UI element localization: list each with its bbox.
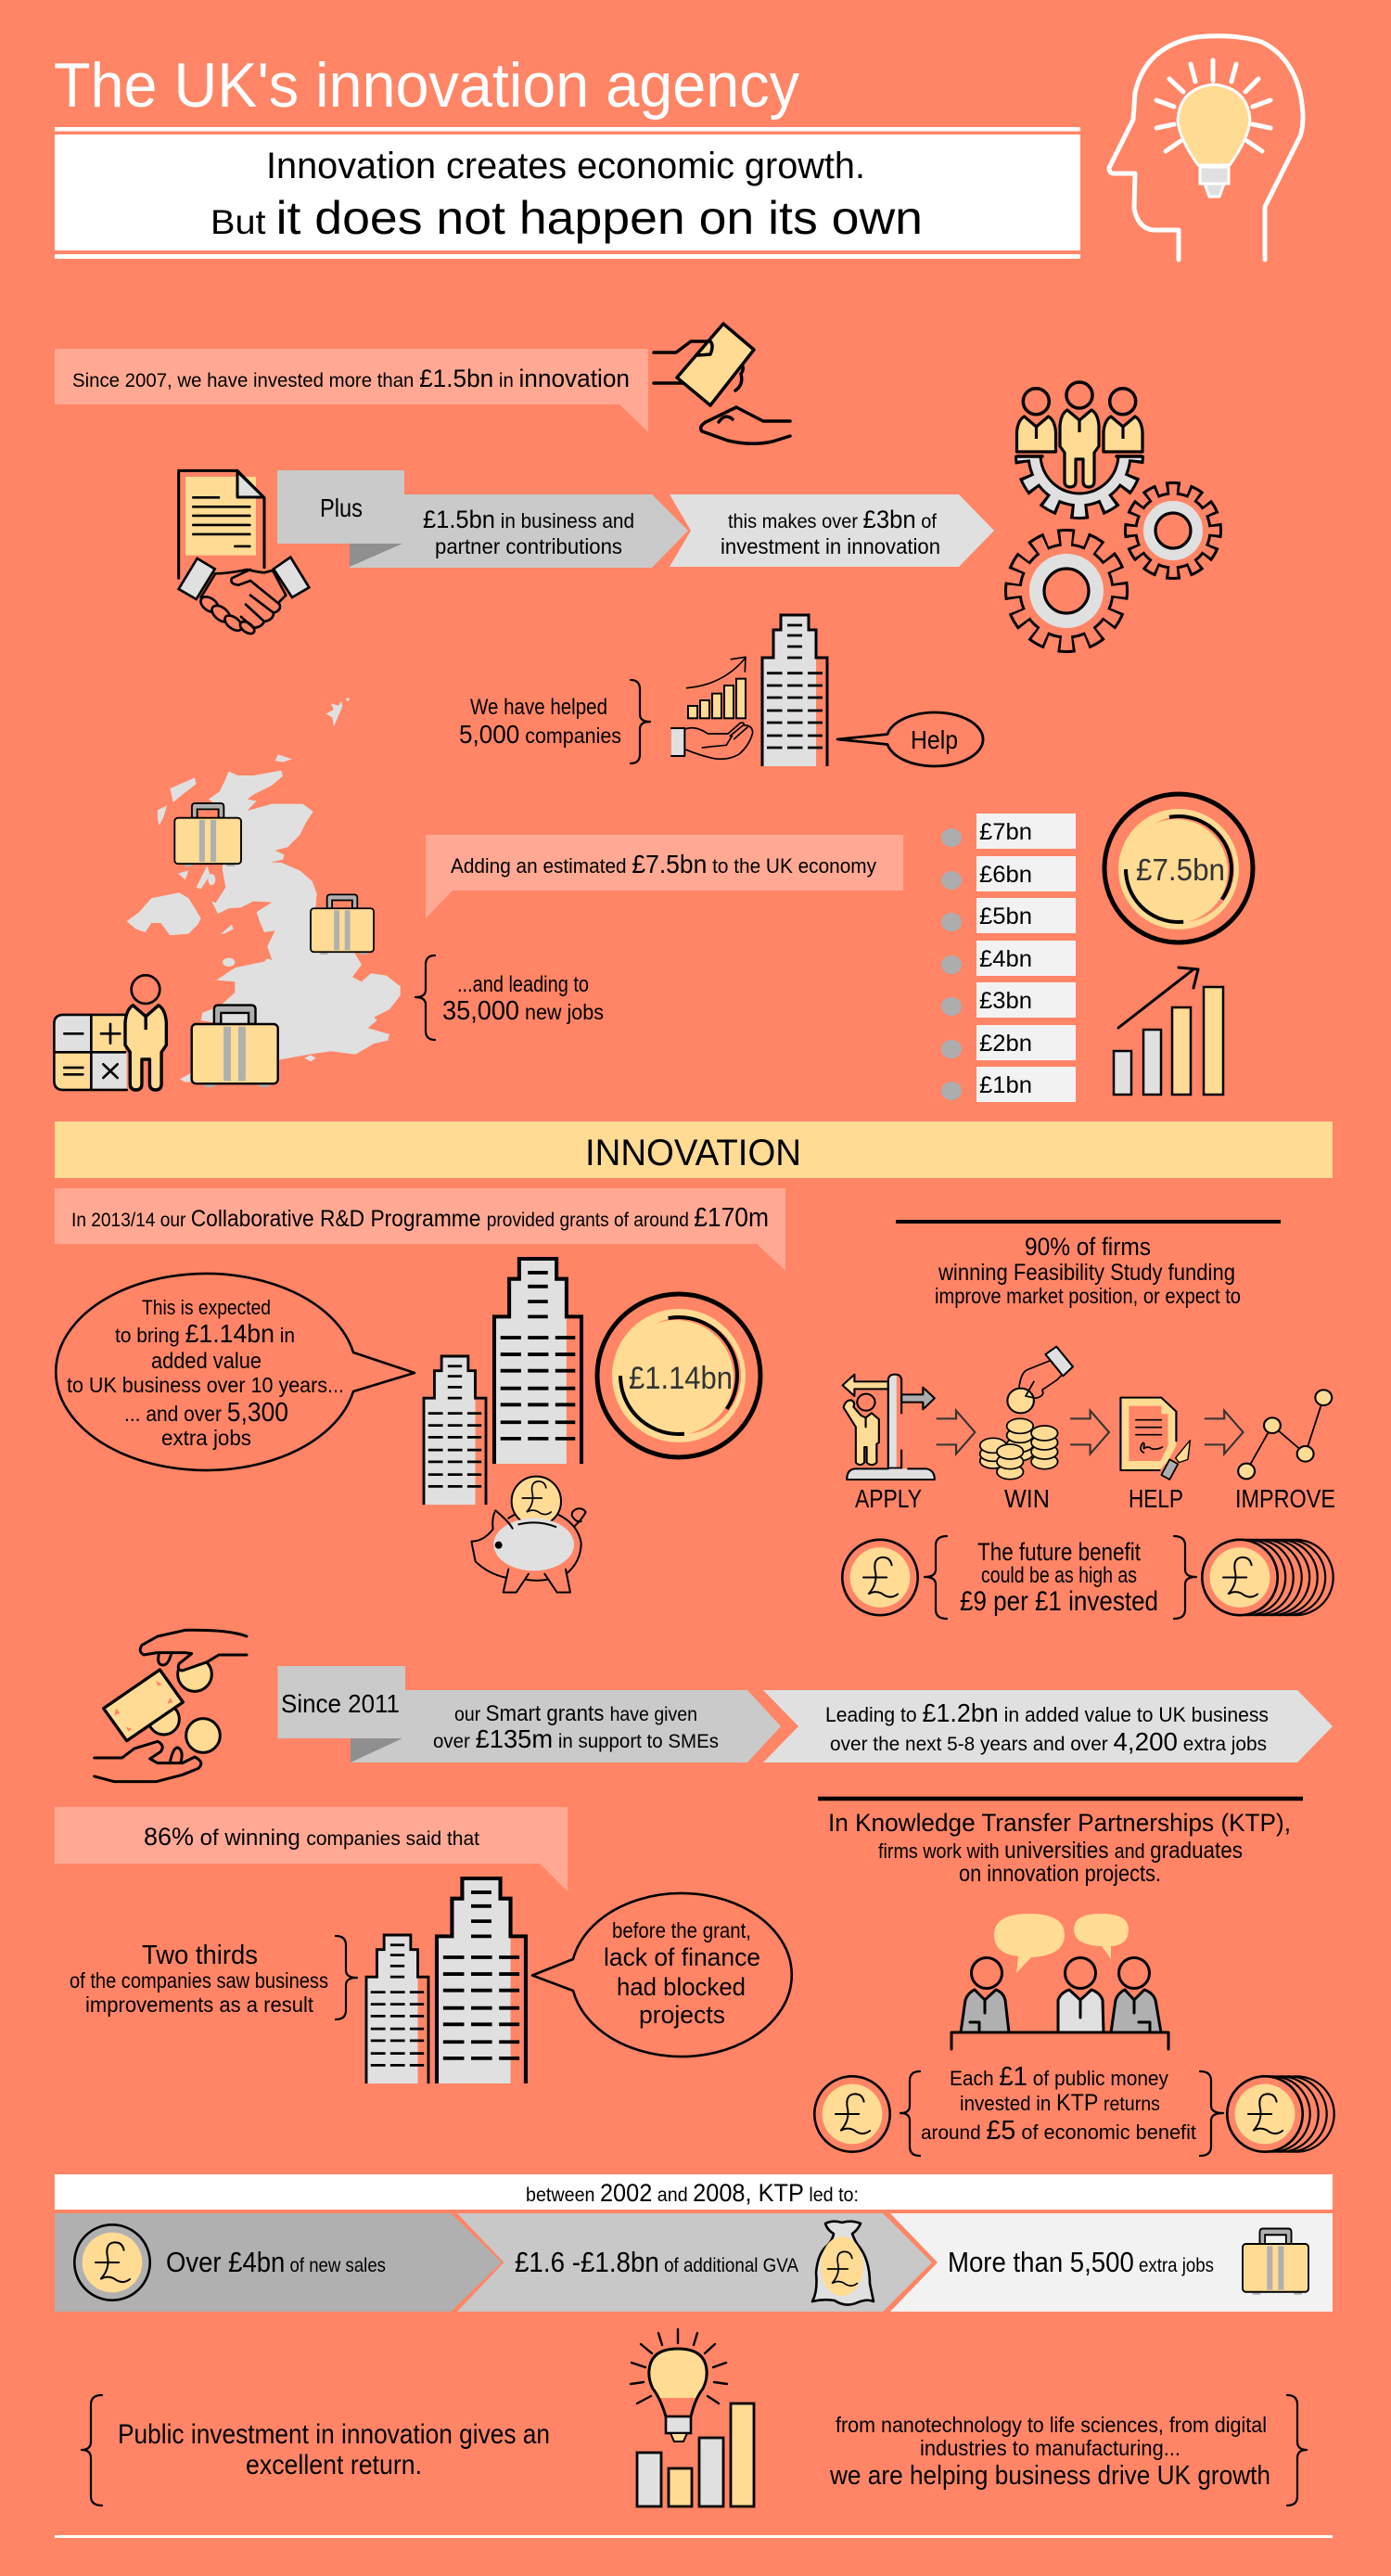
banner: over 3bn: investment in innovation <box>721 534 940 558</box>
icon: small building <box>366 1935 428 2083</box>
callout: adding 7.5bn: Adding an estimated £7.5bn to the UK economy <box>451 850 876 878</box>
text: leading to 35,000 new jobs <box>415 955 604 1040</box>
icon: help document and pen <box>1120 1398 1190 1480</box>
text: 90% of firms: improve market position, or expect to <box>935 1284 1241 1308</box>
step labels: IMPROVE <box>1235 1484 1335 1513</box>
arrow: help to improve <box>1205 1411 1244 1454</box>
panel: headline box: But it does not happen on its own <box>211 192 923 244</box>
text: helping business drive growth: from nanotechnology to life sciences, from digital <box>836 2413 1267 2437</box>
text: public investment: Public investment in innovation gives an <box>118 2419 550 2450</box>
callout: collaborative R&D <box>55 1188 785 1271</box>
text: 90% of firms: winning Feasibility Study funding <box>938 1260 1235 1286</box>
callout: expected added value bubble: This is expected <box>142 1296 271 1319</box>
text: two thirds: improvements as a result <box>85 1993 314 2017</box>
text: leading to 35,000 new jobs: 35,000 new jobs <box>442 996 604 1026</box>
panel: over 4bn of new sales: Over £4bn of new sales <box>166 2246 386 2278</box>
banner: plus business contributions: £1.5bn in business and <box>423 506 634 533</box>
callout: help bubble <box>837 712 983 766</box>
chart: scale of billions: £4bn <box>979 946 1032 972</box>
icon: suitcase england <box>311 894 374 955</box>
callout: lack of finance bubble: projects <box>639 2001 725 2029</box>
icon: hand with growth chart <box>671 657 753 759</box>
icon: head with light bulb <box>1109 36 1303 260</box>
chart: rising bars with arrow <box>1114 968 1223 1095</box>
text: knowledge transfer partnerships: on innovation projects. <box>959 1861 1161 1887</box>
chart: scale of billions: £2bn <box>979 1031 1032 1057</box>
callout: help bubble: Help <box>911 725 958 754</box>
panel: KTP economic benefit: around £5 of economic benefit <box>921 2116 1196 2146</box>
banner: over 3bn <box>670 494 994 567</box>
text: knowledge transfer partnerships <box>818 1799 1303 1887</box>
text: two thirds: Two thirds <box>142 1941 258 1970</box>
banner: leading to 1.2bn: over the next 5-8 years and over 4,200 extra jobs <box>830 1727 1267 1756</box>
text: helped 5,000 companies <box>459 680 650 763</box>
icon: tall building <box>437 1878 526 2083</box>
step labels: WIN <box>1004 1484 1050 1513</box>
text: knowledge transfer partnerships: firms work with universities and graduates <box>878 1838 1243 1864</box>
icon: suitcase scotland <box>174 803 241 866</box>
callout: adding 7.5bn <box>426 835 903 918</box>
text: helping business drive growth: industries to manufacturing... <box>920 2436 1180 2460</box>
heading: between 2002 and 2008: between 2002 and 2008, KTP led to: <box>526 2179 859 2207</box>
icon: 1.14bn coin: £1.14bn <box>629 1361 733 1396</box>
text: 90% of firms: 90% of firms <box>1025 1233 1151 1261</box>
callout: expected added value bubble: to bring £1.14bn in <box>115 1319 295 1348</box>
icon: win coins and hand <box>980 1347 1073 1480</box>
icon: tall building <box>494 1259 581 1464</box>
icon: suitcase south <box>192 1006 278 1087</box>
icon: improve line chart <box>1238 1390 1332 1479</box>
icon: team and gears <box>1013 382 1217 646</box>
callout: collaborative R&D: In 2013/14 our Collaborative R&D Programme provided grants of around £170m <box>71 1203 769 1233</box>
text: 90% of firms <box>896 1222 1281 1308</box>
text: knowledge transfer partnerships: In Knowledge Transfer Partnerships (KTP), <box>828 1809 1291 1837</box>
banner: leading to 1.2bn: Leading to £1.2bn in added value to UK business <box>825 1698 1269 1727</box>
callout: lack of finance bubble: before the grant, <box>612 1918 751 1942</box>
banner: plus business contributions <box>277 470 688 568</box>
callout: 86% of winning companies: 86% of winning companies said that <box>144 1823 479 1851</box>
step labels <box>855 1484 1335 1513</box>
callout: expected added value bubble <box>56 1274 415 1470</box>
panel: KTP economic benefit <box>814 2062 1334 2156</box>
panel: headline box <box>55 127 1080 259</box>
panel: additional GVA <box>457 2213 932 2312</box>
title: The UK's innovation agency <box>54 50 799 121</box>
icon: money passing between hands <box>654 324 790 443</box>
panel: KTP economic benefit: Each £1 of public money <box>950 2062 1168 2092</box>
banner: since 2011 smart grants: over £135m in support to SMEs <box>433 1724 719 1753</box>
callout: lack of finance bubble: lack of finance <box>604 1943 760 1971</box>
panel: future benefit <box>842 1536 1334 1619</box>
panel: future benefit: The future benefit <box>977 1538 1141 1566</box>
panel: future benefit: £9 per £1 invested <box>960 1586 1158 1617</box>
text: helping business drive growth <box>829 2395 1307 2506</box>
banner: plus business contributions: partner contributions <box>435 534 622 558</box>
icon: 1.14bn coin <box>597 1294 760 1457</box>
panel: over 4bn of new sales <box>55 2213 502 2312</box>
icon: big gear <box>1013 536 1120 646</box>
icon: small building <box>424 1356 486 1505</box>
step labels: APPLY <box>855 1484 922 1513</box>
panel: extra jobs: More than 5,500 extra jobs <box>948 2246 1214 2278</box>
panel: extra jobs <box>890 2213 1333 2312</box>
icon: 7.5bn coin <box>1104 794 1253 942</box>
text: two thirds <box>70 1936 357 2019</box>
heading: innovation: INNOVATION <box>585 1133 801 1173</box>
icon: KTP meeting people at table <box>951 1914 1168 2049</box>
callout: since 2007: Since 2007, we have invested more than £1.5bn in innovation <box>72 365 630 392</box>
banner: since 2011 smart grants <box>278 1666 781 1762</box>
arrow: apply to win <box>937 1411 975 1454</box>
callout: expected added value bubble: added value <box>151 1349 262 1374</box>
icon: coin stack <box>1202 1540 1334 1615</box>
text: public investment: excellent return. <box>246 2450 422 2480</box>
callout: expected added value bubble: extra jobs <box>161 1426 251 1450</box>
panel: KTP economic benefit: invested in KTP returns <box>960 2090 1160 2116</box>
heading: innovation <box>55 1121 1333 1178</box>
callout: 86% of winning companies <box>55 1807 568 1891</box>
callout: expected added value bubble: ... and over 5,300 <box>124 1398 288 1428</box>
icon: calculator and man <box>54 975 166 1090</box>
chart: scale of billions: £6bn <box>979 862 1032 888</box>
banner: since 2011 smart grants: our Smart grants have given <box>454 1701 697 1726</box>
chart: scale of billions: £7bn <box>979 819 1032 845</box>
text: helped 5,000 companies: We have helped <box>470 695 607 720</box>
callout: since 2007 <box>55 349 648 432</box>
arrow: win to help <box>1070 1411 1109 1454</box>
text: public investment <box>82 2395 550 2506</box>
icon: light bulb and bars <box>631 2329 754 2506</box>
diagram: apply win help improve <box>843 1347 1335 1513</box>
text: helping business drive growth: we are helping business drive UK growth <box>829 2461 1270 2491</box>
icon: 7.5bn coin: £7.5bn <box>1136 852 1225 887</box>
text: two thirds: of the companies saw business <box>70 1968 328 1993</box>
heading: between 2002 and 2008 <box>55 2174 1333 2210</box>
panel: future benefit: could be as high as <box>981 1563 1137 1588</box>
panel: headline box: Innovation creates economic growth. <box>266 146 865 186</box>
banner: leading to 1.2bn <box>763 1690 1333 1762</box>
icon: hands exchanging money <box>95 1630 247 1782</box>
banner: over 3bn: this makes over £3bn of <box>728 506 937 533</box>
chart: scale of billions <box>941 814 1076 1102</box>
icon: apply signpost <box>843 1375 935 1480</box>
chart: scale of billions: £3bn <box>979 988 1032 1014</box>
banner: since 2011 smart grants: Since 2011 <box>281 1689 400 1718</box>
callout: lack of finance bubble: had blocked <box>617 1973 746 2001</box>
icon: small coin stack <box>1227 2076 1334 2152</box>
text: leading to 35,000 new jobs: ...and leading to <box>457 972 589 997</box>
chart: scale of billions: £5bn <box>979 904 1032 929</box>
banner: plus business contributions: Plus <box>320 493 363 522</box>
icon: building <box>762 615 827 766</box>
step labels: HELP <box>1129 1484 1183 1513</box>
icon: document and handshake <box>179 470 309 636</box>
callout: expected added value bubble: to UK business over 10 years... <box>67 1373 344 1397</box>
map: United Kingdom <box>127 698 401 1083</box>
icon: money bag <box>812 2222 874 2305</box>
callout: lack of finance bubble <box>532 1893 792 2057</box>
icon: small gear <box>1129 488 1217 573</box>
panel: additional GVA: £1.6 -£1.8bn of additional GVA <box>515 2246 798 2278</box>
text: helped 5,000 companies: 5,000 companies <box>459 720 621 749</box>
icon: piggy bank <box>471 1477 586 1593</box>
chart: scale of billions: £1bn <box>979 1072 1032 1098</box>
